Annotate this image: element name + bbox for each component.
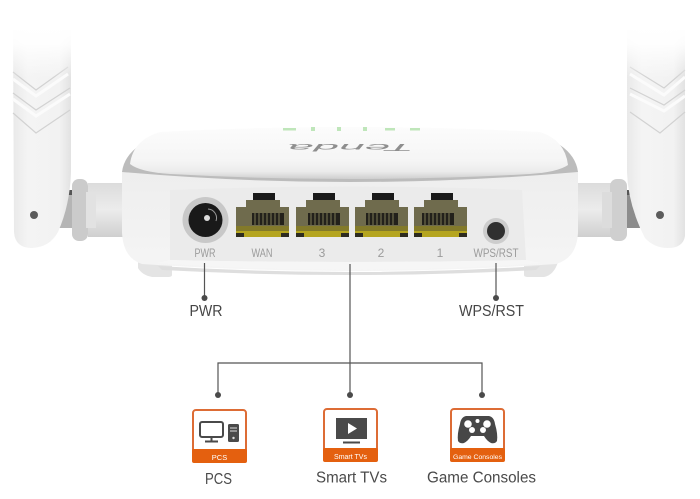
port labels: 2 xyxy=(378,246,385,260)
port panel xyxy=(170,186,526,262)
port labels: 3 xyxy=(319,246,326,260)
router grey rim xyxy=(122,145,578,182)
connector lines xyxy=(204,263,496,395)
router xyxy=(122,127,578,277)
LAN ports xyxy=(236,193,467,237)
port 1 xyxy=(414,193,467,237)
port labels: WAN xyxy=(252,246,272,260)
icon: Game Consoles xyxy=(450,409,505,462)
label: PWR: PWR xyxy=(190,303,222,320)
port 3 xyxy=(296,193,349,237)
WPS button xyxy=(483,218,509,244)
port labels xyxy=(194,246,519,260)
LED indicators xyxy=(283,127,420,131)
label: Game Consoles: Game Consoles xyxy=(427,470,536,486)
router lid xyxy=(130,127,568,179)
port 2 xyxy=(355,193,408,237)
connector end dots xyxy=(202,295,499,398)
left antenna xyxy=(10,26,124,248)
PWR jack xyxy=(182,197,228,243)
right antenna xyxy=(576,26,690,248)
port labels: 1 xyxy=(437,246,444,260)
icon: PCS: PCS xyxy=(212,453,227,462)
router body xyxy=(122,172,578,271)
port labels: WPS/RST xyxy=(474,246,519,260)
label: PCS: PCS xyxy=(205,471,232,488)
icon: Game Consoles: Game Consoles xyxy=(453,454,503,461)
port labels: PWR xyxy=(194,246,216,260)
label: Smart TVs: Smart TVs xyxy=(316,470,387,486)
label: WPS/RST: WPS/RST xyxy=(459,303,524,320)
icon: Smart TVs xyxy=(323,409,378,462)
router feet xyxy=(138,262,558,277)
logo: Tenda xyxy=(286,141,414,152)
icon: Smart TVs: Smart TVs xyxy=(334,454,367,461)
icon: PCS xyxy=(192,410,247,463)
port WAN xyxy=(236,193,289,237)
